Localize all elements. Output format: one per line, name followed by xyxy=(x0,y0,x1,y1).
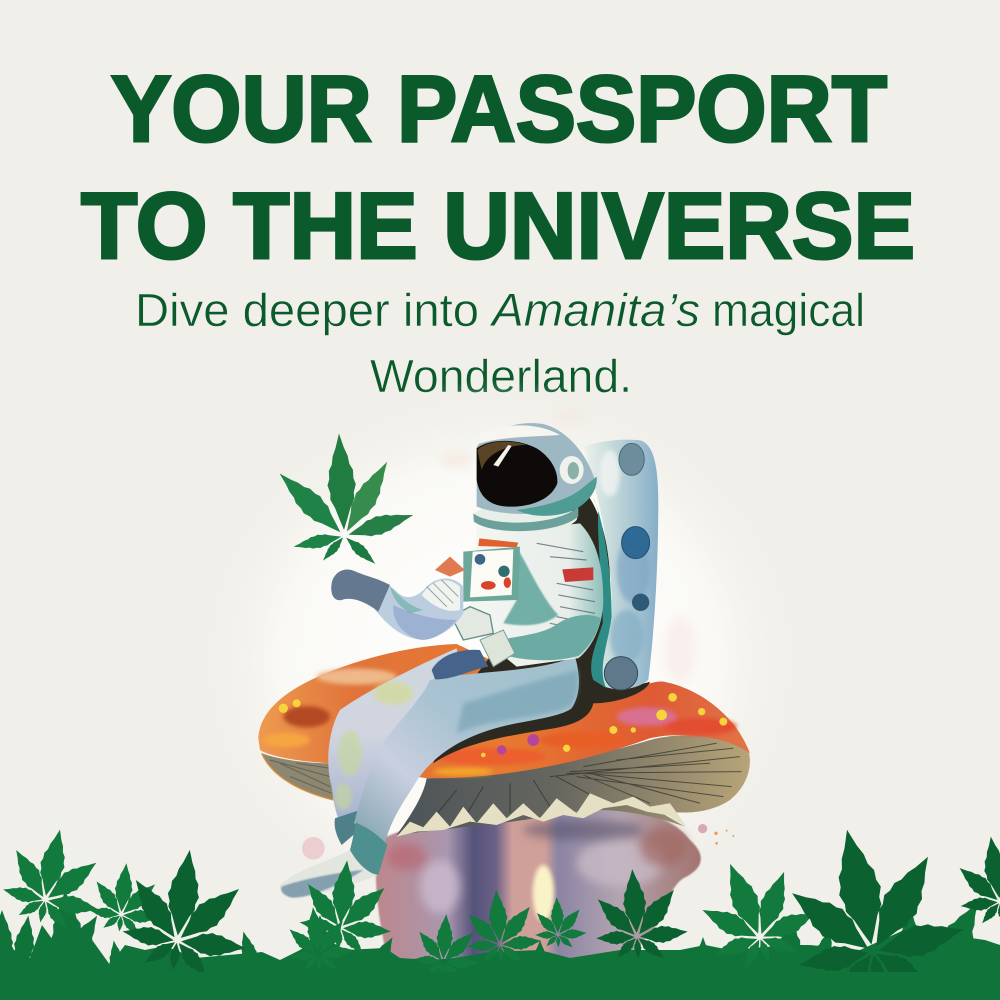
subtitle: Amanita’s xyxy=(489,284,700,336)
leaf 4 xyxy=(294,856,398,960)
green wash on back leg xyxy=(335,682,413,810)
title: TO THE UNIVERSE xyxy=(81,173,915,278)
title: YOUR PASSPORT xyxy=(111,56,887,161)
leaf 3 dark xyxy=(114,842,258,987)
paint splatter xyxy=(302,824,734,860)
leaf 1 xyxy=(0,820,113,939)
front leg xyxy=(354,657,579,843)
back leg xyxy=(328,648,463,818)
torso xyxy=(463,523,603,667)
chest control box xyxy=(463,538,520,602)
back boot xyxy=(335,810,365,845)
glove xyxy=(331,569,390,612)
leaf 8 xyxy=(533,896,587,951)
sleeve patch xyxy=(562,567,593,582)
neck collar xyxy=(473,502,578,532)
boot xyxy=(280,823,387,898)
mushroom left gills xyxy=(262,753,333,800)
leaf 11 dark xyxy=(769,810,976,1000)
leaf 6 xyxy=(411,912,482,984)
leaf 7 xyxy=(461,887,543,969)
leaf 9 dark xyxy=(589,866,690,967)
floating leaf xyxy=(271,433,416,568)
teal chest shading xyxy=(503,550,558,625)
wrist cuff xyxy=(480,630,515,667)
suit stripes xyxy=(537,543,595,630)
front arm xyxy=(508,615,601,660)
watercolor stains xyxy=(440,408,695,683)
illustration: astronaut on mushroom xyxy=(258,408,750,970)
dark shadow behind astronaut xyxy=(433,483,650,763)
subtitle: magical xyxy=(712,284,865,336)
leaf 2 xyxy=(86,860,165,940)
leaf 12 dark xyxy=(949,830,1000,934)
mushroom stem xyxy=(376,806,701,970)
raised arm xyxy=(375,557,465,640)
title xyxy=(81,56,915,278)
watercolor glow behind illustration xyxy=(190,380,810,940)
subtitle: Dive deeper into xyxy=(135,284,479,336)
subtitle xyxy=(135,284,865,402)
bottom ground strip xyxy=(0,972,1000,1000)
chest buckle xyxy=(452,607,493,640)
subtitle: Wonderland. xyxy=(370,350,632,402)
helmet xyxy=(477,423,597,516)
front glove xyxy=(432,650,488,679)
mushroom cap xyxy=(258,644,750,778)
mushroom right gills xyxy=(397,735,750,837)
leaf 10 xyxy=(683,841,828,987)
foliage ground xyxy=(0,889,1000,1000)
leaf 5 xyxy=(283,903,356,977)
backpack xyxy=(583,440,658,690)
teal shading on front leg xyxy=(457,670,578,733)
